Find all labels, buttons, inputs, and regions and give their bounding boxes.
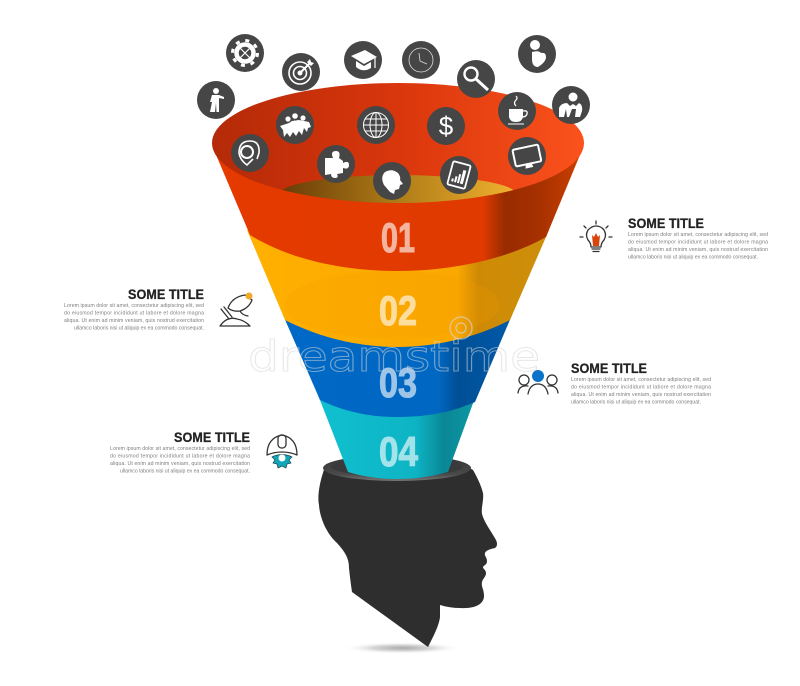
number 01: 01 xyxy=(381,214,415,261)
icon: target xyxy=(282,53,320,91)
number 04: 04 xyxy=(379,428,419,475)
body text xyxy=(628,232,768,260)
icon: magnifier xyxy=(457,60,495,98)
head rim xyxy=(323,455,471,481)
head shape xyxy=(318,462,497,647)
icon: puzzle piece xyxy=(317,145,355,183)
body text: aliqua. Ut enim ad minim veniam, quis nostrud exercitation xyxy=(628,247,768,253)
body text: Lorem ipsum dolor sit amet, consectetur adipiscing elit, sed xyxy=(64,303,204,309)
rim opening xyxy=(331,458,463,476)
body text: do eiusmod tempor incididunt ut labore et dolore magna xyxy=(571,384,711,390)
band 01 red xyxy=(214,150,582,271)
icon: head xyxy=(373,162,411,200)
body text xyxy=(571,377,711,406)
icon: user with heart xyxy=(518,35,556,73)
band 03 blue xyxy=(283,315,512,417)
number 03: 03 xyxy=(379,359,417,406)
body text: ullamco laboris nisi ut aliquip ex ea commodo consequat. xyxy=(571,400,701,406)
head silhouette with rim xyxy=(318,455,497,654)
number 02: 02 xyxy=(379,287,417,334)
icon: light bulb xyxy=(580,221,612,252)
icon: coffee cup xyxy=(498,92,536,130)
funnel numbers xyxy=(379,214,419,475)
info block: left 02 xyxy=(64,287,252,332)
body text: do eiusmod tempor incididunt ut labore et dolore magna xyxy=(64,310,204,316)
body text: Lorem ipsum dolor sit amet, consectetur adipiscing elit, sed xyxy=(571,377,711,383)
icon: people xyxy=(518,370,558,394)
info block: top right xyxy=(580,216,768,260)
title: SOME TITLE xyxy=(628,216,704,231)
watermark xyxy=(248,317,540,381)
icon: location tag xyxy=(231,134,269,172)
icon: helmet with gear xyxy=(267,435,297,468)
body text: aliqua. Ut enim ad minim veniam, quis nostrud exercitation xyxy=(110,461,250,467)
icon: graduation cap xyxy=(344,41,382,79)
body text: ullamco laboris nisi ut aliquip ex ea commodo consequat. xyxy=(628,254,758,260)
body text xyxy=(110,446,250,474)
icon: person pointing xyxy=(197,81,235,119)
icon: businessman xyxy=(552,86,590,124)
band 04 teal xyxy=(318,395,476,479)
icon: gear xyxy=(226,34,264,72)
icon: dollar xyxy=(427,107,465,145)
funnel interior xyxy=(212,83,584,203)
body text: Lorem ipsum dolor sit amet, consectetur adipiscing elit, sed xyxy=(628,232,768,238)
info block: right 03 xyxy=(518,361,711,406)
icon: dollar: $ xyxy=(439,111,454,141)
band 02 yellow xyxy=(247,230,549,347)
body text xyxy=(64,303,204,332)
title: SOME TITLE xyxy=(128,287,204,302)
funnel floor xyxy=(282,175,514,203)
watermark: dreamstime xyxy=(248,332,540,381)
icon: team xyxy=(276,106,314,144)
body text: aliqua. Ut enim ad minim veniam, quis nostrud exercitation xyxy=(64,318,204,324)
yellow band shading xyxy=(284,271,500,339)
title: SOME TITLE xyxy=(174,430,250,445)
body text: ullamco laboris nisi ut aliquip ex ea commodo consequat. xyxy=(74,326,204,332)
head shadow xyxy=(342,642,462,654)
body text: Lorem ipsum dolor sit amet, consectetur adipiscing elit, sed xyxy=(110,446,250,452)
info block: left 04 xyxy=(110,430,297,474)
icon: tablet chart xyxy=(440,156,478,194)
body text: ullamco laboris nisi ut aliquip ex ea commodo consequat. xyxy=(120,468,250,474)
title: SOME TITLE xyxy=(571,361,647,376)
funnel xyxy=(212,83,584,479)
icon: monitor xyxy=(508,137,546,175)
icon: microscope xyxy=(220,292,252,326)
body text: aliqua. Ut enim ad minim veniam, quis nostrud exercitation xyxy=(571,392,711,398)
body text: do eiusmod tempor incididunt ut labore et dolore magna xyxy=(110,454,250,460)
icon: globe xyxy=(357,106,395,144)
body text: do eiusmod tempor incididunt ut labore et dolore magna xyxy=(628,240,768,246)
icon: clock xyxy=(402,41,440,79)
